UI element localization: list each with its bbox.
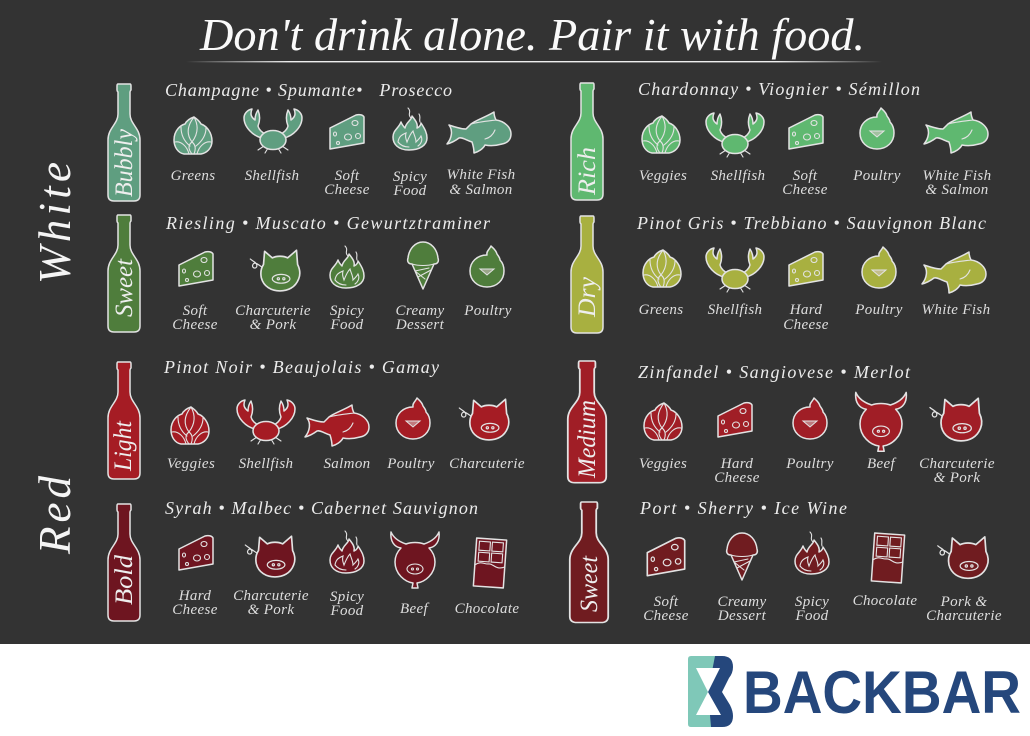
icon: shellfish — [706, 248, 764, 292]
label: Soft Cheese: Soft — [183, 303, 208, 319]
label: Hard Cheese: Hard — [720, 456, 753, 472]
bottle: Bubbly: Bubbly — [111, 128, 138, 197]
heading: Medium varieties: Zinfandel • Sangiovese • Merlot — [638, 362, 911, 382]
icon: creamy dessert — [727, 533, 757, 580]
icon: hard cheese — [718, 403, 752, 437]
panel: Bold — [108, 498, 519, 621]
icon: veggies — [171, 407, 209, 444]
title: Don't drink alone. Pair it with food. — [199, 9, 865, 60]
label: Charcuterie & Pork: Charcuterie — [233, 588, 309, 604]
icon: veggies — [642, 116, 680, 153]
label: Poultry: Poultry — [852, 168, 901, 184]
bottle: Light: Light — [110, 420, 137, 472]
icon: chocolate — [473, 538, 507, 588]
icon: charcuterie and pork — [930, 398, 982, 441]
label: Salmon: Salmon — [323, 456, 371, 472]
heading: Sweet red varieties: Port • Sherry • Ice Wine — [639, 498, 847, 518]
label: White Fish & Salmon: White Fish — [447, 167, 515, 183]
heading: Rich varieties: Chardonnay • Viognier • Sémillon — [638, 79, 920, 99]
icon: charcuterie and pork — [245, 536, 295, 577]
label: Hard Cheese: Cheese — [714, 470, 760, 486]
icon: spicy food — [393, 108, 427, 150]
bottle: Dry — [571, 216, 603, 333]
icon: shellfish — [244, 109, 302, 153]
label: Shellfish: Shellfish — [708, 302, 762, 318]
icon: greens — [643, 250, 681, 287]
label: Chocolate: Chocolate — [853, 593, 917, 609]
icon: spicy food — [330, 531, 364, 573]
icon: charcuterie and pork — [250, 250, 300, 291]
label: Charcuterie & Pork: & Pork — [934, 470, 980, 486]
label: Soft Cheese: Cheese — [782, 182, 828, 198]
label: Soft Cheese: Soft — [654, 594, 679, 610]
panel: Bubbly — [108, 80, 515, 201]
label: Shellfish: Shellfish — [245, 168, 299, 184]
label: White Fish & Salmon: & Salmon — [925, 182, 989, 198]
icon: white fish and salmon — [447, 112, 511, 153]
panel: Light — [108, 357, 525, 479]
label: Poultry: Poultry — [854, 302, 903, 318]
label: Veggies: Veggies — [639, 168, 687, 184]
icon: chocolate — [871, 533, 905, 583]
label: Chocolate: Chocolate — [455, 601, 519, 617]
label: Beef: Beef — [400, 601, 430, 617]
panel: Rich — [571, 79, 991, 200]
heading: Bubbly varieties: Champagne • Spumante• Prosecco — [165, 80, 452, 100]
bottle: Bold: Bold — [111, 554, 138, 605]
label: Spicy Food: Food — [392, 183, 427, 199]
label: Hard Cheese: Cheese — [783, 317, 829, 333]
section label: Red: Red — [30, 476, 80, 555]
label: White Fish: White Fish — [922, 302, 990, 318]
label: Soft Cheese: Cheese — [172, 317, 218, 333]
label: Hard Cheese: Hard — [178, 588, 211, 604]
label: Spicy Food: Spicy — [330, 589, 364, 605]
heading: Dry varieties: Pinot Gris • Trebbiano • Sauvignon Blanc — [636, 213, 986, 233]
bottle: Sweet white: Sweet — [111, 258, 138, 317]
bottle: Sweet red: Sweet — [576, 555, 603, 612]
panel: Sweet white — [108, 213, 512, 333]
label: Spicy Food: Food — [329, 603, 364, 619]
icon: soft cheese — [647, 538, 685, 576]
label: Spicy Food: Spicy — [330, 303, 364, 319]
icon: white fish and salmon — [924, 112, 988, 153]
bottle: Rich: Rich — [574, 147, 601, 196]
label: Spicy Food: Food — [329, 317, 364, 333]
icon: white fish — [922, 252, 986, 293]
icon: soft cheese — [330, 115, 364, 149]
label: Creamy Dessert: Creamy — [395, 303, 445, 319]
icon: spicy food — [795, 532, 829, 574]
icon: hard cheese — [789, 252, 823, 286]
label: Poultry: Poultry — [785, 456, 834, 472]
icon: poultry — [396, 398, 430, 439]
bottle: Sweet white — [108, 215, 140, 332]
icon: shellfish — [706, 113, 764, 157]
label: Spicy Food: Food — [794, 608, 829, 624]
bottle: Bubbly — [108, 84, 140, 201]
label: Charcuterie: Charcuterie — [449, 456, 525, 472]
label: Soft Cheese: Soft — [335, 168, 360, 184]
label: Creamy Dessert: Dessert — [395, 317, 445, 333]
label: Hard Cheese: Hard — [789, 302, 822, 318]
label: Beef: Beef — [867, 456, 897, 472]
icon: creamy dessert — [408, 242, 438, 289]
label: Pork & Charcuterie: Pork & — [940, 594, 987, 610]
label: Hard Cheese: Cheese — [172, 602, 218, 618]
bottle: Sweet red — [570, 502, 608, 623]
icon: soft cheese — [789, 115, 823, 149]
icon: spicy food — [330, 246, 364, 288]
label: Soft Cheese: Soft — [793, 168, 818, 184]
label: Charcuterie & Pork: & Pork — [250, 317, 296, 333]
label: Poultry: Poultry — [463, 303, 512, 319]
icon: poultry — [860, 108, 894, 149]
label: Charcuterie & Pork: & Pork — [248, 602, 294, 618]
icon: veggies — [644, 403, 682, 440]
bottle: Medium: Medium — [574, 400, 601, 479]
panel: Dry — [571, 213, 990, 333]
label: White Fish & Salmon: White Fish — [923, 168, 991, 184]
label: Charcuterie & Pork: Charcuterie — [919, 456, 995, 472]
icon: greens — [174, 117, 212, 154]
label: Shellfish: Shellfish — [239, 456, 293, 472]
label: Spicy Food: Spicy — [393, 169, 427, 185]
heading: Bold varieties: Syrah • Malbec • Cabernet Sauvignon — [165, 498, 478, 518]
label: Shellfish: Shellfish — [711, 168, 765, 184]
icon: poultry — [470, 246, 504, 287]
icon: hard cheese — [179, 536, 213, 570]
bottle: Rich — [571, 83, 603, 200]
bottle: Light — [108, 362, 140, 479]
panel: Medium — [568, 361, 995, 486]
icon: poultry — [862, 247, 896, 288]
icon: beef — [391, 532, 439, 588]
label: Greens: Greens — [639, 302, 683, 318]
heading: Light varieties: Pinot Noir • Beaujolais • Gamay — [163, 357, 439, 377]
label: Veggies: Veggies — [167, 456, 215, 472]
label: Soft Cheese: Cheese — [324, 182, 370, 198]
icon: pork and charcuterie — [938, 537, 988, 578]
section label: White: White — [30, 162, 80, 284]
label: Pork & Charcuterie: Charcuterie — [926, 608, 1002, 624]
icon: soft cheese — [179, 252, 213, 286]
label: Creamy Dessert: Creamy — [717, 594, 767, 610]
label: Soft Cheese: Cheese — [643, 608, 689, 624]
bottle: Bold — [108, 504, 140, 621]
icon: shellfish — [237, 400, 295, 444]
icon: beef — [856, 392, 906, 451]
panel: Sweet red — [570, 498, 1002, 624]
label: Veggies: Veggies — [639, 456, 687, 472]
icon: charcuterie — [459, 399, 509, 440]
icon: poultry — [793, 398, 827, 439]
label: Charcuterie & Pork: Charcuterie — [235, 303, 311, 319]
label: Poultry: Poultry — [386, 456, 435, 472]
heading: Sweet white varieties: Riesling • Muscato • Gewurtztraminer — [165, 213, 491, 233]
bottle: Dry: Dry — [574, 276, 601, 318]
icon: salmon — [305, 405, 369, 446]
bottle: Medium — [568, 361, 606, 483]
label: Creamy Dessert: Dessert — [717, 608, 767, 624]
label: White Fish & Salmon: & Salmon — [449, 182, 513, 198]
label: Spicy Food: Spicy — [795, 594, 829, 610]
label: Greens: Greens — [171, 168, 215, 184]
